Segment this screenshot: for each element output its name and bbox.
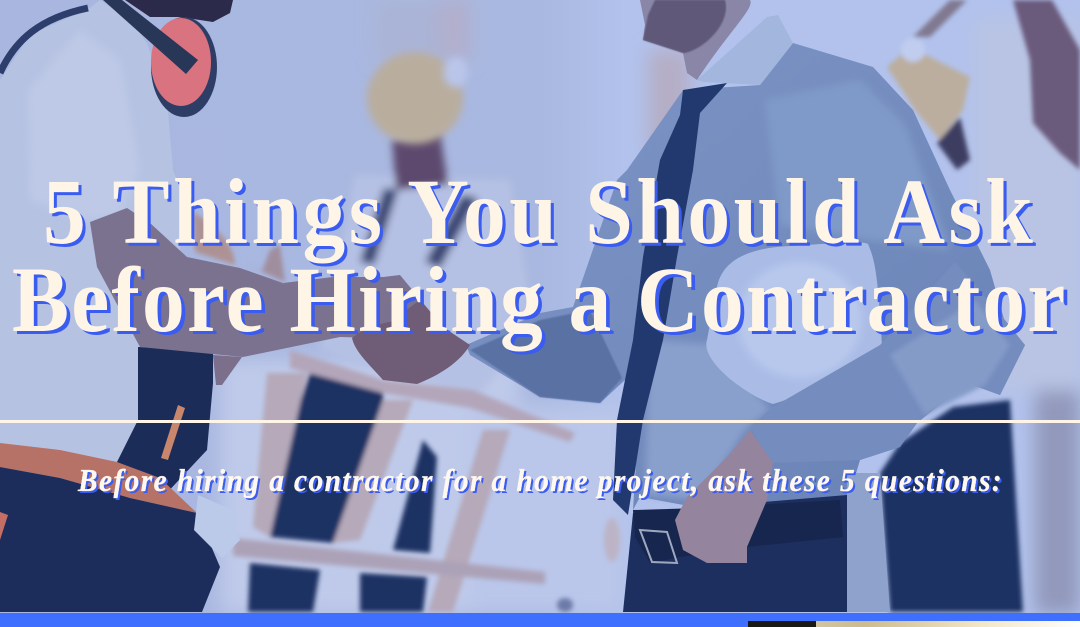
right man: shirt tail by the hip xyxy=(847,473,890,612)
background worker: white shirt with suspenders xyxy=(320,132,535,400)
small blurred objects by the floor xyxy=(557,518,620,612)
background worker: yellow hard hat xyxy=(367,52,468,144)
title: 5 Things You Should Ask xyxy=(43,161,1033,264)
title: Before Hiring a Contractor xyxy=(12,249,1065,352)
bottom blue band xyxy=(0,613,1080,627)
right background worker xyxy=(880,0,1080,612)
next section photo peek xyxy=(748,621,1080,627)
blurred wooden ladder with dark trousers behind xyxy=(233,350,575,612)
left worker: waist and jeans xyxy=(0,443,240,612)
ear defender xyxy=(103,0,217,117)
left worker: tool holster xyxy=(117,347,242,497)
left worker: t-shirt xyxy=(0,0,185,462)
right man: necktie xyxy=(613,83,727,515)
title: 5 Things You Should Ask xyxy=(46,164,1036,267)
right man: belt and buckle xyxy=(633,500,843,563)
blurred wooden posts and walls xyxy=(220,0,1080,614)
shoulder strap xyxy=(0,8,88,73)
right man: blue shirt xyxy=(466,43,1025,510)
right man: hand on hip xyxy=(675,430,773,563)
right man: shirt collar xyxy=(697,15,793,85)
right man: forearm sleeve xyxy=(750,262,1025,463)
worker's beard xyxy=(125,0,233,22)
right man: trousers xyxy=(623,495,860,612)
left worker: forearm reaching for handshake xyxy=(90,208,453,357)
title xyxy=(12,161,1069,355)
subtitle: Before hiring a contractor for a home project, ask these 5 questions: xyxy=(79,465,1004,500)
divider line xyxy=(0,420,1080,423)
white hard hat xyxy=(706,242,882,404)
handshake xyxy=(352,300,470,384)
title: Before Hiring a Contractor xyxy=(16,252,1069,355)
subtitle: Before hiring a contractor for a home project, ask these 5 questions: xyxy=(77,463,1002,498)
right man: neck and beard xyxy=(640,0,751,80)
